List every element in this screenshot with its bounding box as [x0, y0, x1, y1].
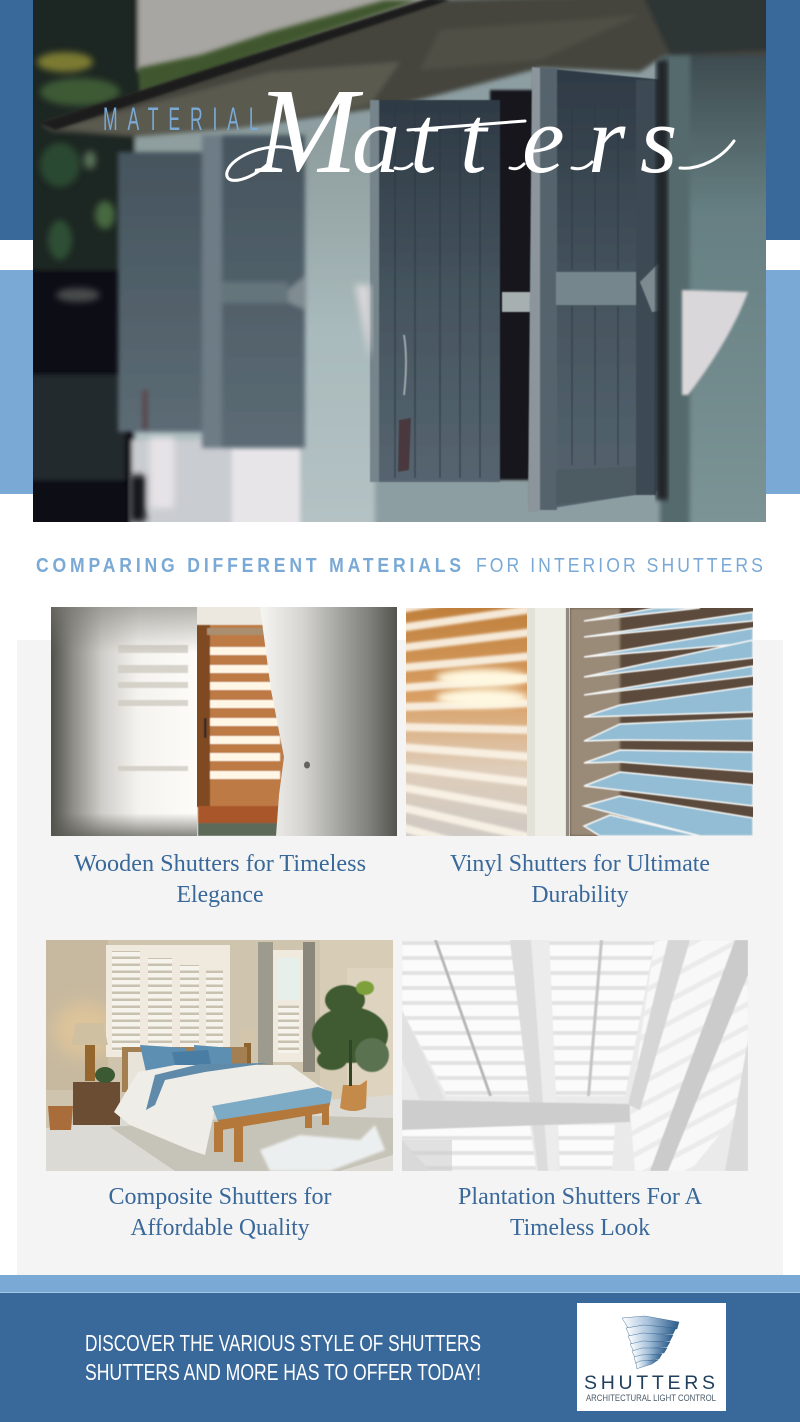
caption: plantation shutters: Timeless Look	[510, 1215, 650, 1241]
left curtain	[51, 607, 197, 836]
sunlit wall patch	[682, 290, 748, 395]
caption: wooden shutters: Elegance	[176, 882, 264, 908]
caption: composite shutters: Composite Shutters for	[108, 1184, 332, 1210]
logo wordmark: SHUTTERS	[584, 1372, 715, 1394]
caption: vinyl shutters: Durability	[532, 882, 628, 908]
photo: wooden shutters with sheer curtains	[51, 607, 397, 836]
footer call to action: SHUTTERS AND MORE HAS TO OFFER TODAY!	[85, 1359, 481, 1385]
footer call to action: DISCOVER THE VARIOUS STYLE OF SHUTTERS	[85, 1330, 481, 1356]
shutter panels	[402, 940, 655, 1171]
window gap	[488, 88, 532, 482]
caption: wooden shutters	[74, 851, 366, 908]
side window and curtain	[258, 942, 315, 1072]
logo icon: stacked louvres	[622, 1316, 679, 1369]
eave underside	[40, 0, 780, 137]
photo: white plantation shutters	[402, 940, 748, 1171]
frame members	[402, 940, 630, 1171]
right light blue side bar	[766, 270, 800, 494]
hero photo: weathered wooden shutters on a building	[20, 0, 780, 535]
title word: MATERIAL: MATERIAL	[103, 103, 259, 137]
heading light part: FOR INTERIOR SHUTTERS	[476, 554, 763, 576]
lamps	[71, 1023, 258, 1081]
photo: vinyl shutters with blue slats	[406, 608, 753, 836]
main window shutters	[106, 945, 230, 1057]
title	[103, 64, 734, 199]
blurred left shutters	[118, 135, 306, 448]
caption: wooden shutters: Wooden Shutters for Timeless	[74, 851, 366, 877]
foliage patches	[37, 52, 120, 302]
lower wall highlights	[130, 438, 174, 522]
caption: plantation shutters	[458, 1184, 703, 1241]
title word: Matters: atters	[352, 86, 677, 193]
right dark background	[570, 608, 753, 836]
right curtain	[260, 607, 397, 836]
left dark blue side bar	[0, 0, 33, 240]
heading bold part: COMPARING DIFFERENT MATERIALS	[36, 554, 461, 576]
caption: vinyl shutters: Vinyl Shutters for Ultimate	[450, 851, 710, 877]
rug	[110, 1115, 393, 1171]
right blue slats	[584, 608, 753, 836]
left slats	[406, 608, 527, 836]
logo tagline: ARCHITECTURAL LIGHT CONTROL	[586, 1393, 716, 1403]
title word: Matters: M	[254, 64, 364, 199]
lower wall	[132, 440, 232, 530]
plant	[312, 981, 389, 1111]
right angled slats	[628, 940, 748, 1171]
light grey content panel	[17, 640, 783, 1275]
nightstand and basket	[48, 1067, 120, 1130]
caption: plantation shutters: Plantation Shutters For A	[458, 1184, 703, 1210]
logo	[577, 1303, 726, 1411]
light blue footer band	[0, 1275, 800, 1293]
floor	[46, 1095, 393, 1171]
duvet	[114, 1065, 330, 1155]
bench	[212, 1087, 332, 1162]
bed headboard and pillows	[122, 1045, 247, 1092]
right dark blue side bar	[766, 0, 800, 240]
central post	[527, 608, 570, 836]
caption: vinyl shutters	[450, 851, 710, 908]
section heading	[36, 554, 763, 576]
footer call to action	[85, 1330, 481, 1385]
wooden window	[193, 625, 288, 836]
dark blue footer	[0, 1293, 800, 1422]
photo: composite shutters in a bedroom	[46, 940, 393, 1171]
left light blue side bar	[0, 270, 33, 494]
right open shutters	[370, 67, 665, 512]
title swash	[227, 121, 734, 180]
caption: composite shutters	[108, 1184, 332, 1241]
caption: composite shutters: Affordable Quality	[130, 1215, 310, 1241]
